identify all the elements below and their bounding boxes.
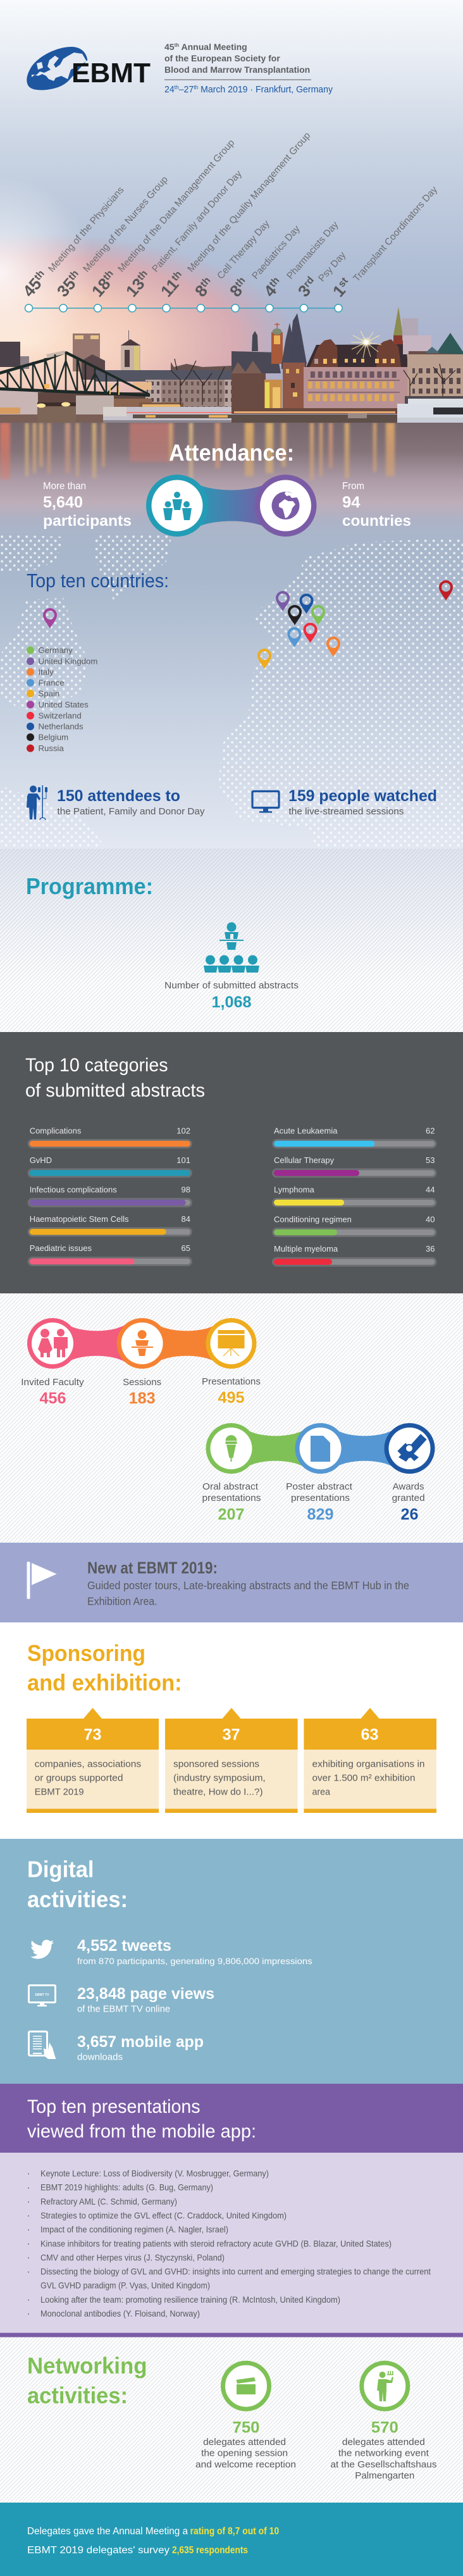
card: sponsored sessions: theatre, How do I...?) <box>173 1787 263 1798</box>
bar: Conditioning regimen 40: Conditioning regimen <box>274 1215 352 1224</box>
panel: new at EBMT 2019 <box>0 1543 463 1622</box>
icon: speaker <box>132 1330 153 1356</box>
legend: countries: United States <box>38 700 89 709</box>
stat: networking event: at the Gesellschaftshaus <box>330 2459 436 2470</box>
panel: river reflections <box>0 423 395 480</box>
heading: sponsoring <box>27 1640 182 1696</box>
panel: delegates survey footer: rating of 8,7 out of 10 <box>190 2526 279 2537</box>
timeline ordinals: th <box>268 275 281 289</box>
header text: meeting title: Annual Meeting <box>179 42 247 52</box>
timeline labels: Pharmacists Day <box>285 220 341 282</box>
labels: oral abstract presentations: 207 <box>218 1506 244 1524</box>
timeline ordinals: 1 <box>329 281 349 301</box>
bar: Conditioning regimen 40 <box>273 1215 436 1236</box>
icon: presentation board <box>218 1330 244 1356</box>
icon: diploma <box>397 1434 427 1462</box>
card: companies: or groups supported <box>35 1773 123 1784</box>
heading: networking <box>27 2353 147 2408</box>
stat: submitted abstracts: Number of submitted abstracts <box>164 980 299 991</box>
bar: Infectious complications 98: 98 <box>182 1185 190 1195</box>
panel: top ten presentations list: Refractory AML (C. Schmid, Germany) <box>40 2197 177 2206</box>
timeline labels <box>46 130 440 284</box>
heading: digital activities: activities: <box>27 1886 128 1912</box>
timeline ordinals: st <box>336 275 350 289</box>
header text: date and place: 24 <box>164 84 175 95</box>
timeline ordinals: 4 <box>260 281 280 301</box>
timeline ordinals: 11 <box>157 275 183 301</box>
icon: speaker and audience <box>204 923 259 973</box>
heading: top 10 categories <box>25 1055 205 1101</box>
bar: Cellular Therapy 53: Cellular Therapy <box>274 1155 335 1165</box>
timeline ordinals: th <box>101 268 116 283</box>
heading: networking: Networking <box>27 2353 147 2379</box>
timeline ordinals: th <box>66 268 81 283</box>
card: sponsored sessions <box>165 1708 298 1813</box>
icon: patient with IV <box>27 785 47 820</box>
header text: meeting title: Blood and Marrow Transplantation <box>164 65 310 75</box>
panel: programme numbers <box>0 1293 463 1543</box>
stat: opening session: and welcome reception <box>195 2459 296 2470</box>
card: companies: 73 <box>83 1726 101 1743</box>
timeline labels: Cell Therapy Day <box>215 218 272 282</box>
panel: top ten presentations list: Strategies to optimize the GVL effect (C. Craddock, United Kingdom) <box>40 2211 287 2220</box>
labels: poster abstract presentations <box>286 1481 353 1524</box>
labels: awards granted: Awards <box>393 1481 424 1492</box>
panel: header sky, photo and attendance background <box>0 0 463 849</box>
header text: meeting title: th <box>175 42 179 48</box>
icon: monitor <box>252 791 279 812</box>
panel: top ten presentations list: Looking after the team: promoting resilience training (R. McIntosh, United Kingdom) <box>40 2295 340 2305</box>
bar: Conditioning regimen 40: 40 <box>426 1215 435 1224</box>
heading: Top ten countries: Top ten countries: <box>27 569 169 592</box>
stat: mobile app: downloads <box>77 2052 123 2063</box>
legend: countries: United Kingdom <box>38 657 97 666</box>
legend: countries: Russia <box>38 744 64 753</box>
stat: countries: countries <box>342 513 411 530</box>
card: exhibiting organisations: over 1.500 m² exhibition <box>312 1773 415 1784</box>
connector: oral, poster, awards <box>206 1423 435 1474</box>
panel: delegates survey footer: 2,635 respondents <box>172 2545 248 2556</box>
stat: countries: 94 <box>342 494 361 511</box>
header text: meeting title: 45 <box>164 42 175 52</box>
bar: GvHD 101 <box>28 1155 191 1177</box>
icon: microphone <box>225 1435 237 1462</box>
card: exhibiting organisations: 63 <box>361 1726 378 1743</box>
panel: top ten presentations list: Dissecting the biology of GVL and GVHD: insights into current and emerging strategies to change the current <box>40 2267 431 2277</box>
labels: poster abstract presentations: Poster abstract <box>286 1481 353 1492</box>
panel: top ten presentations list: Impact of the conditioning regimen (A. Nagler, Israel) <box>40 2225 228 2234</box>
panel: programme <box>0 849 463 1032</box>
bar: Haematopoietic Stem Cells 84 <box>28 1214 191 1236</box>
panel: top ten presentations heading <box>0 2084 463 2153</box>
bar: Paediatric issues 65: 65 <box>182 1243 190 1253</box>
legend: countries: Spain <box>38 688 59 699</box>
panel: top ten presentations list: GVL GVHD paradigm (P. Vyas, United Kingdom) <box>40 2281 210 2291</box>
timeline labels: Meeting of the Physicians <box>46 185 127 275</box>
icon: waiter with tray <box>362 2363 408 2409</box>
logo: EBMT <box>27 47 151 90</box>
timeline ordinals: 8 <box>226 281 246 301</box>
stat: opening session <box>195 2418 296 2470</box>
bar: Lymphoma 44 <box>273 1185 436 1206</box>
timeline ordinals: th <box>135 268 150 283</box>
icon: clapperboard <box>223 2363 269 2409</box>
heading: sponsoring: Sponsoring <box>27 1640 145 1666</box>
bar: Acute Leukaemia 62: Acute Leukaemia <box>274 1126 338 1135</box>
labels: faculty: Invited Faculty <box>21 1377 84 1388</box>
timeline of meetings <box>19 130 440 312</box>
bar: Multiple myeloma 36 <box>273 1244 436 1266</box>
panel: Frankfurt skyline photo <box>0 307 463 424</box>
timeline ordinals: th <box>32 268 47 283</box>
labels: poster abstract presentations: 829 <box>307 1506 334 1524</box>
stat: submitted abstracts: 1,068 <box>211 993 252 1011</box>
icon: people <box>163 492 192 520</box>
timeline labels: Meeting of the Data Management Group <box>116 137 237 275</box>
labels: awards granted <box>392 1481 425 1524</box>
stat: participants: participants <box>43 513 132 530</box>
bar: Infectious complications 98 <box>28 1185 191 1206</box>
header text: date and place: March 2019 · Frankfurt, Germany <box>198 84 333 95</box>
legend: countries: Switzerland <box>38 711 82 720</box>
icon: EBMT TV monitor <box>29 1986 56 2007</box>
text: new features: Guided poster tours, Late-breaking abstracts and the EBMT Hub in the <box>87 1579 409 1592</box>
header text: meeting title <box>164 42 310 75</box>
icon: EBMT TV monitor: EBMT TV <box>35 1993 49 1997</box>
heading: sponsoring: and exhibition: <box>27 1670 182 1696</box>
timeline ordinals: rd <box>302 275 316 289</box>
stat: opening session: 750 <box>233 2418 259 2436</box>
labels: sessions <box>123 1377 161 1407</box>
stat: page views: of the EBMT TV online <box>77 2003 170 2014</box>
stat: countries: From <box>342 481 364 492</box>
labels: sessions: 183 <box>129 1390 156 1407</box>
heading: Programme: Programme: <box>26 873 153 899</box>
stat: opening session: the opening session <box>201 2448 288 2459</box>
logo wordmark: EBMT <box>71 58 151 89</box>
timeline ordinals: 45 <box>19 274 46 301</box>
stat: live-streamed sessions: the live-streamed sessions <box>288 806 404 817</box>
panel: top ten presentations heading: viewed from the mobile app: <box>27 2121 256 2142</box>
timeline labels: Psy Day <box>316 249 348 284</box>
bar: Haematopoietic Stem Cells 84: Haematopoietic Stem Cells <box>30 1214 129 1224</box>
timeline ordinals: 18 <box>88 274 114 301</box>
stat: networking event: Palmengarten <box>355 2470 414 2481</box>
icon: tablet with hand <box>29 2031 56 2059</box>
bar: Multiple myeloma 36: Multiple myeloma <box>274 1244 338 1254</box>
card: companies <box>27 1708 159 1813</box>
labels: presentations: Presentations <box>202 1376 261 1387</box>
timeline labels: Paediatrics Day <box>250 223 302 282</box>
header text: date and place: th <box>175 84 179 90</box>
stat: Patient, Family and Donor Day: 150 attendees to <box>57 787 180 805</box>
labels: oral abstract presentations: presentations <box>202 1493 261 1503</box>
text: new features <box>87 1579 409 1608</box>
heading: Attendance: Attendance: <box>169 440 294 466</box>
icon: document <box>311 1436 330 1462</box>
bar: Complications 102 <box>28 1126 191 1148</box>
heading: new at EBMT: New at EBMT 2019: <box>87 1559 218 1577</box>
bar: GvHD 101: 101 <box>176 1155 190 1165</box>
panel: top ten presentations list: EBMT 2019 highlights: adults (G. Bug, Germany) <box>40 2183 213 2193</box>
heading: digital activities <box>27 1857 128 1912</box>
stat: mobile app <box>77 2033 204 2063</box>
timeline ordinals: th <box>199 275 213 289</box>
panel: top ten presentations list: CMV and other Herpes virus (J. Styczynski, Poland) <box>40 2253 225 2262</box>
labels: faculty <box>21 1377 84 1407</box>
map pins <box>43 580 453 669</box>
stat: participants <box>43 481 132 530</box>
stat: countries <box>342 481 411 530</box>
panel: top ten presentations list <box>0 2153 463 2337</box>
timeline ordinals: 13 <box>122 274 149 301</box>
icon: globe <box>272 492 300 520</box>
stat: live-streamed sessions <box>288 787 437 817</box>
labels: oral abstract presentations: Oral abstract <box>202 1481 259 1492</box>
timeline labels: Meeting of the Quality Management Group <box>185 130 312 275</box>
stat: tweets: 4,552 tweets <box>77 1937 171 1955</box>
panel: networking activities <box>0 2337 463 2503</box>
stat: Patient, Family and Donor Day: the Patient, Family and Donor Day <box>57 806 205 817</box>
timeline dots <box>25 304 342 312</box>
bar: Lymphoma 44: Lymphoma <box>274 1185 315 1195</box>
bar: Lymphoma 44: 44 <box>426 1185 435 1195</box>
panel: digital activities <box>0 1839 463 2084</box>
labels: poster abstract presentations: presentations <box>291 1493 350 1503</box>
header text: meeting title: of the European Society for <box>164 53 280 63</box>
timeline ordinals: 8 <box>191 281 211 301</box>
timeline ordinals <box>19 267 355 301</box>
legend: countries: Italy <box>38 667 54 677</box>
header text: date and place: th <box>194 84 198 90</box>
stat: participants: 5,640 <box>43 494 83 511</box>
panel: delegates survey footer: EBMT 2019 delegates' survey <box>27 2545 170 2556</box>
card: exhibiting organisations: area <box>312 1787 331 1798</box>
bar: Paediatric issues 65: Paediatric issues <box>30 1243 92 1253</box>
connector: participants to countries <box>146 475 316 537</box>
icon: twitter bird <box>30 1939 54 1959</box>
legend: countries: France <box>38 678 65 687</box>
bar: GvHD 101: GvHD <box>30 1155 52 1165</box>
panel: delegates survey footer: Delegates gave the Annual Meeting a <box>27 2526 188 2537</box>
icon: flag <box>27 1562 57 1599</box>
timeline ordinals: 3 <box>294 281 314 301</box>
labels: sessions: Sessions <box>123 1377 161 1388</box>
world map dot pattern <box>219 538 463 849</box>
stat: live-streamed sessions: 159 people watched <box>288 787 437 805</box>
panel: top ten presentations heading: Top ten presentations <box>27 2096 201 2117</box>
card: sponsored sessions: 37 <box>223 1726 240 1743</box>
bar: Cellular Therapy 53: 53 <box>426 1155 435 1165</box>
card: exhibiting organisations: exhibiting organisations in <box>312 1759 425 1770</box>
text: new features: Exhibition Area. <box>87 1595 157 1608</box>
timeline labels: Meeting of the Nurses Group <box>81 174 170 275</box>
stat: networking event <box>330 2418 436 2481</box>
stat: tweets: from 870 participants, generating 9,806,000 impressions <box>77 1956 312 1966</box>
timeline labels: Transplant Coordinators Day <box>351 184 440 284</box>
heading: digital activities: Digital <box>27 1857 94 1882</box>
stat: tweets <box>77 1937 312 1966</box>
timeline labels: Patient, Family and Donor Day <box>150 168 244 275</box>
bar: Infectious complications 98: Infectious complications <box>30 1185 117 1195</box>
card: companies: EBMT 2019 <box>35 1787 84 1798</box>
stat: page views <box>77 1985 214 2014</box>
legend: countries: Belgium <box>38 733 68 742</box>
panel: delegates survey footer <box>0 2503 463 2576</box>
legend: countries: Netherlands <box>38 721 83 731</box>
bar: Haematopoietic Stem Cells 84: 84 <box>182 1214 190 1224</box>
heading: networking: activities: <box>27 2382 128 2408</box>
panel: river water <box>0 423 463 538</box>
stat: opening session: delegates attended <box>203 2437 286 2448</box>
timeline ordinals: 35 <box>53 274 80 301</box>
panel: sponsoring and exhibition <box>0 1622 463 1839</box>
heading: top 10 categories: Top 10 categories <box>25 1055 168 1076</box>
stat: networking event: 570 <box>371 2418 398 2436</box>
legend: countries: Germany <box>38 645 73 655</box>
card: sponsored sessions: sponsored sessions <box>173 1759 259 1770</box>
timeline ordinals: th <box>170 269 184 283</box>
bar: Complications 102: Complications <box>30 1126 82 1135</box>
bar: Acute Leukaemia 62 <box>273 1126 436 1148</box>
connector: faculty, sessions, presentations <box>27 1318 257 1369</box>
bar: Cellular Therapy 53 <box>273 1155 436 1177</box>
stat: networking event: the networking event <box>338 2448 429 2459</box>
labels: presentations: 495 <box>218 1389 245 1407</box>
bar: Complications 102: 102 <box>176 1126 190 1135</box>
card: companies: companies, associations <box>35 1759 141 1770</box>
panel: top ten presentations list: Monoclonal antibodies (Y. Floisand, Norway) <box>40 2309 200 2318</box>
heading: top 10 categories: of submitted abstracts <box>25 1080 205 1101</box>
stat: submitted abstracts <box>164 980 299 1011</box>
labels: presentations <box>202 1376 261 1407</box>
header text: date and place: –27 <box>179 84 194 95</box>
timeline ordinals: th <box>233 275 247 289</box>
bar: Acute Leukaemia 62: 62 <box>426 1126 435 1135</box>
stat: mobile app: 3,657 mobile app <box>77 2033 204 2051</box>
stat: Patient, Family and Donor Day <box>57 787 205 817</box>
stat: page views: 23,848 page views <box>77 1985 214 2003</box>
labels: awards granted: 26 <box>401 1506 419 1524</box>
panel: top ten presentations list: Keynote Lecture: Loss of Biodiversity (V. Mosbrugger, Germany) <box>40 2168 269 2178</box>
bar: Multiple myeloma 36: 36 <box>426 1244 435 1254</box>
card: sponsored sessions: (industry symposium, <box>173 1773 266 1784</box>
card: exhibiting organisations <box>304 1708 436 1813</box>
stat: participants: More than <box>43 481 86 492</box>
stat: networking event: delegates attended <box>342 2437 425 2448</box>
labels: faculty: 456 <box>39 1390 66 1407</box>
icon: faculty <box>38 1329 68 1357</box>
panel: top 10 categories <box>0 1032 463 1293</box>
panel: top ten presentations list: Kinase inhibitors for treating patients with steroid refractory acute GVHD (B. Blazar, United States) <box>40 2239 392 2248</box>
legend: countries <box>27 645 97 753</box>
labels: awards granted: granted <box>392 1493 425 1503</box>
bar: Paediatric issues 65 <box>28 1243 191 1266</box>
labels: oral abstract presentations <box>202 1481 261 1524</box>
